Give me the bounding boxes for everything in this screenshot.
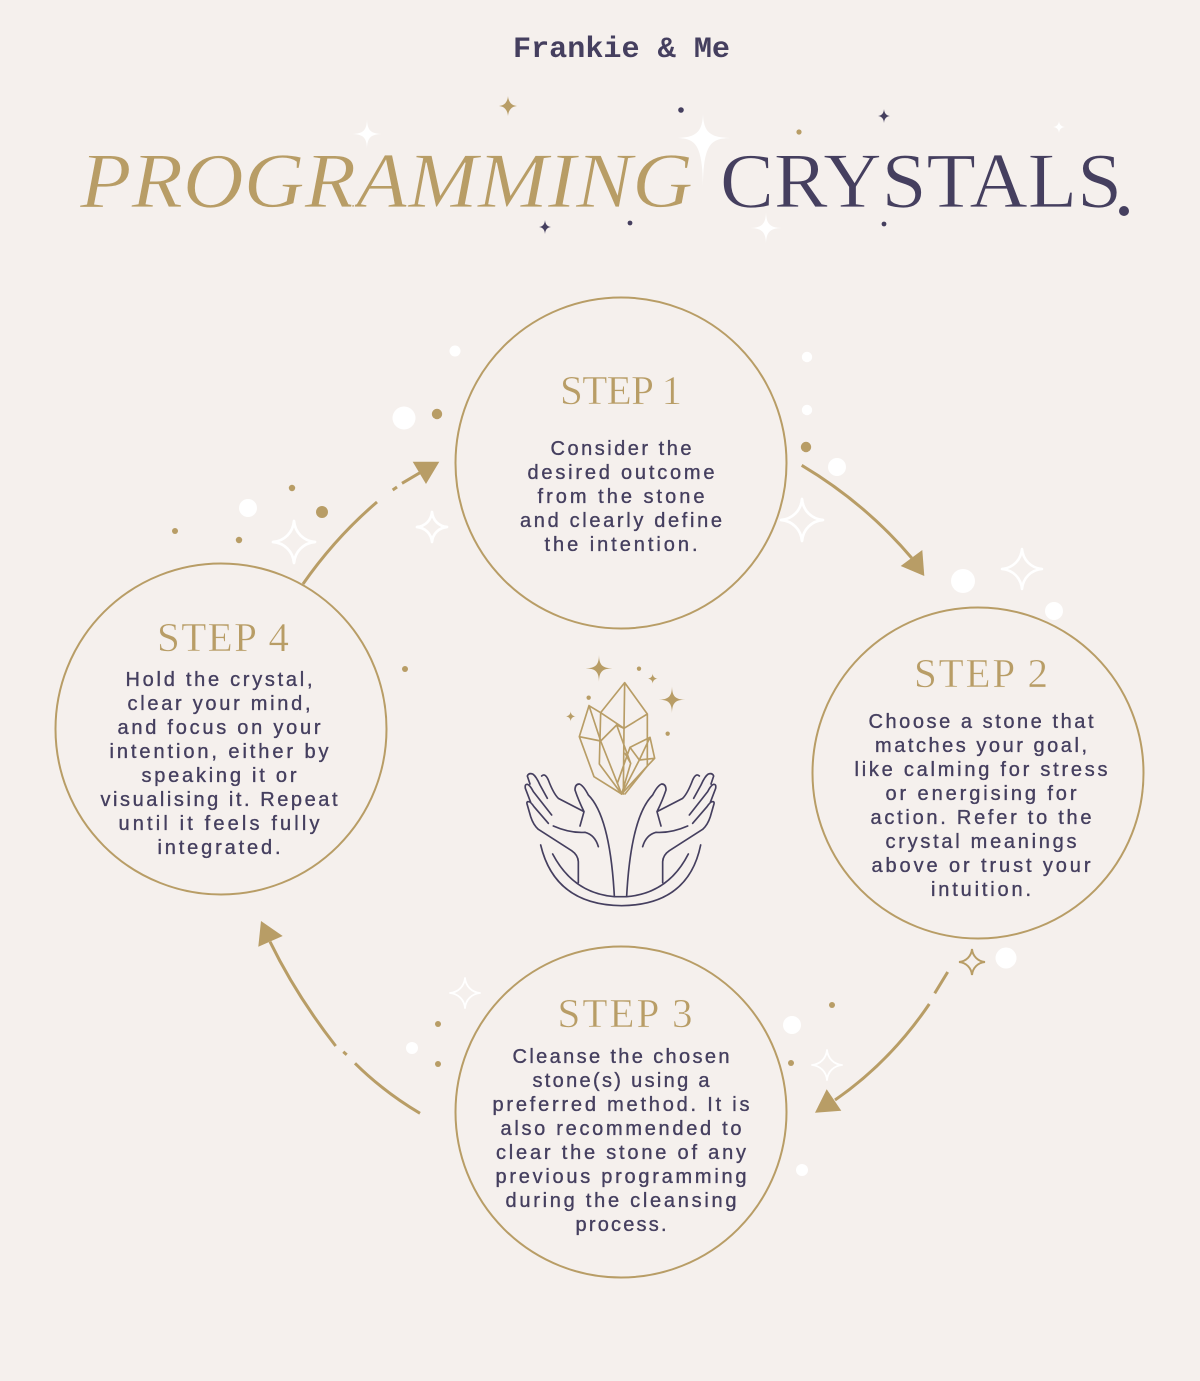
arrow: step 3 to step 4 [258,921,420,1113]
panel: step 2: matches your goal, [875,735,1087,757]
panel: step 3: preferred method. It is [492,1094,750,1116]
panel: step 1 [456,298,786,628]
panel: step 4: speaking it or [142,765,297,787]
panel: step 3: previous programming [496,1166,746,1188]
panel: step 4 [56,564,386,894]
arrow: step 2 to step 3 [815,972,948,1113]
icon: crystal held in two hands [525,655,716,906]
panel: step 2: crystal meanings [886,831,1076,853]
panel: step 4: and focus on your [118,717,321,739]
title [79,137,1129,224]
panel: step 3: process. [576,1214,666,1236]
panel: step 2 [812,608,1144,938]
panel: step 3 [456,946,786,1278]
panel: step 2: STEP 2 [914,650,1048,696]
panel: step 2: above or trust your [872,855,1091,877]
panel: step 4: visualising it. Repeat [100,789,338,811]
panel: step 2: intuition. [931,879,1031,901]
panel: step 1: desired outcome [528,462,714,484]
panel: step 1: STEP 1 [560,367,682,413]
panel: step 3: STEP 3 [558,990,692,1036]
panel: step 4: STEP 4 [157,614,289,660]
panel: step 1: from the stone [538,486,704,508]
panel: step 3: also recommended to [500,1118,742,1140]
panel: step 4: integrated. [158,837,280,859]
icon: right hand [627,774,716,896]
title sparkles [352,96,1065,244]
panel: step 1: and clearly define [520,510,722,532]
title: PROGRAMMING [79,137,693,224]
panel: step 1: the intention. [544,534,698,556]
icon: left hand [525,774,614,896]
panel: step 3: clear the stone of any [496,1142,746,1164]
panel: step 3: during the cleansing [506,1190,736,1212]
title: CRYSTALS [720,137,1122,224]
brand name: Frankie & Me [513,33,730,67]
icon: bowl arcs [541,845,701,906]
panel: step 4: intention, either by [110,741,328,763]
panel: step 4: Hold the crystal, [126,669,312,691]
arrow: step 4 to step 1 [303,462,439,584]
decorative dots and sparkles around the cycle [172,346,1063,1176]
panel: step 3: stone(s) using a [532,1070,710,1092]
panel: step 1: Consider the [550,438,692,460]
panel: step 3: Cleanse the chosen [512,1046,730,1068]
panel: step 2: or energising for [886,783,1077,805]
icon: crystal [579,683,655,794]
panel: step 2: action. Refer to the [870,807,1092,829]
panel: step 4: clear your mind, [128,693,310,715]
panel: step 4: until it feels fully [118,813,320,835]
icon: crystal sparkles [566,655,685,736]
panel: step 2: like calming for stress [854,759,1108,781]
panel: step 2: Choose a stone that [868,711,1094,733]
arrow: step 1 to step 2 [802,465,924,576]
